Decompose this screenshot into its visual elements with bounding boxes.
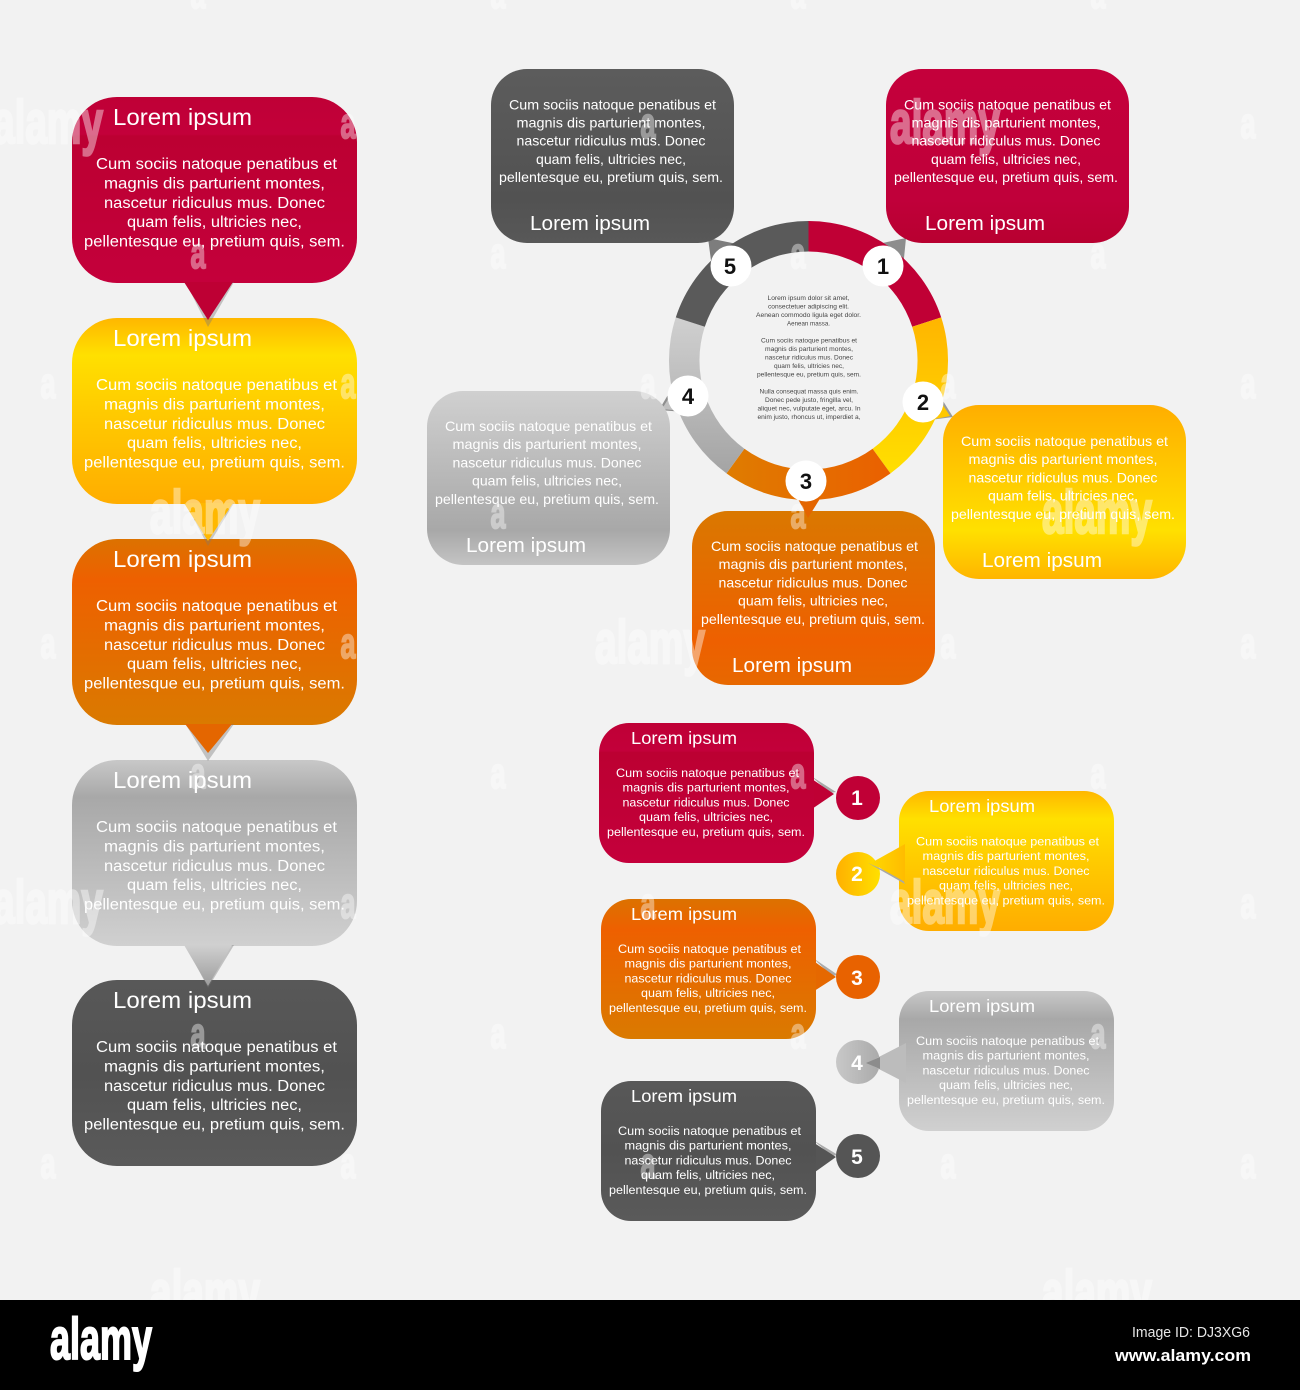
panel: ring callout dark — [491, 69, 737, 268]
text block: ring orange: Cum sociis natoque penatibus et — [711, 538, 918, 554]
panel: left column red box — [72, 97, 357, 283]
panel: ring callout gray — [427, 388, 684, 565]
text block: lower yellow: nascetur ridiculus mus. Donec — [922, 864, 1090, 878]
text block: ring orange: nascetur ridiculus mus. Donec — [718, 574, 908, 590]
watermark overlay: a — [1240, 99, 1256, 148]
text block: left red: pellentesque eu, pretium quis, sem. — [84, 234, 345, 251]
text block: ring red: Cum sociis natoque penatibus et — [904, 96, 1111, 112]
text block: left orange: pellentesque eu, pretium quis, sem. — [84, 676, 345, 693]
text block: left dark: magnis dis parturient montes, — [104, 1058, 325, 1075]
text block: ring yellow: quam felis, ultricies nec, — [988, 488, 1138, 504]
text block: ring dark: Cum sociis natoque penatibus et — [509, 96, 716, 112]
icon: ring number 2: 2 — [917, 390, 929, 415]
heading: lower gray: Lorem ipsum — [929, 996, 1035, 1016]
watermark overlay: a — [640, 99, 656, 148]
text block: ring centre: pellentesque eu, pretium quis, sem. — [757, 372, 861, 379]
text block: ring centre: Aenean commodo ligula eget dolor. — [756, 312, 861, 319]
watermark overlay: alamy — [150, 479, 260, 546]
icon: ring number 1: 1 — [877, 254, 889, 279]
watermark overlay: a — [940, 619, 956, 668]
watermark overlay: a — [340, 879, 356, 928]
text block: ring centre: Lorem ipsum dolor sit amet, — [768, 295, 850, 302]
text block: ring red: magnis dis parturient montes, — [912, 115, 1100, 131]
text block: ring centre: Cum sociis natoque penatibus et — [761, 338, 857, 345]
heading: ring gray: Lorem ipsum — [466, 534, 586, 557]
text block: lower orange — [609, 942, 807, 1015]
arrow: lower yellow — [868, 844, 905, 884]
icon: ring number 3 — [786, 460, 826, 502]
heading: lower red: Lorem ipsum — [631, 728, 737, 748]
watermark overlay: alamy — [1042, 1259, 1152, 1326]
panel: lower dark box — [601, 1081, 838, 1221]
watermark overlay: a — [1090, 229, 1106, 278]
heading: left yellow: Lorem ipsum — [113, 325, 252, 351]
icon: ring number 4: 4 — [682, 384, 695, 409]
text block: ring centre: nascetur ridiculus mus. Donec — [765, 355, 854, 362]
watermark overlay: a — [1240, 1139, 1256, 1188]
chart: segmented ring — [668, 221, 948, 518]
watermark overlay: a — [790, 1009, 806, 1058]
panel: lower orange box — [601, 899, 838, 1039]
watermark overlay: a — [190, 229, 206, 278]
text block: left red — [84, 156, 345, 251]
text block: ring centre: Aenean massa. — [787, 320, 830, 328]
text block: ring yellow: Cum sociis natoque penatibus et — [961, 433, 1168, 449]
text block: lower gray: magnis dis parturient montes, — [922, 1049, 1090, 1063]
text block: left orange: quam felis, ultricies nec, — [127, 656, 302, 673]
watermark overlay: a — [940, 359, 956, 408]
panel: ring callout orange — [692, 511, 935, 685]
icon: ring number 5 — [710, 246, 752, 286]
watermark overlay: a — [490, 749, 506, 798]
watermark overlay: a — [340, 619, 356, 668]
icon: lower number 3 — [836, 955, 880, 999]
panel: left column yellow box — [72, 318, 357, 504]
text block: lower yellow — [907, 834, 1105, 907]
arrow: lower gray — [866, 1043, 906, 1083]
heading: lower yellow: Lorem ipsum — [929, 796, 1035, 816]
text block: lower yellow: Cum sociis natoque penatibus et — [916, 834, 1100, 848]
text block: ring centre: consectetuer adipiscing elit. — [768, 304, 849, 310]
text block: lower red: quam felis, ultricies nec, — [639, 810, 773, 824]
text block: ring yellow — [951, 433, 1175, 522]
heading: left orange: Lorem ipsum — [113, 546, 252, 572]
text block: ring centre: aliquet nec, vulputate eget, arcu. In — [758, 406, 861, 412]
icon: ring number 5: 5 — [724, 254, 736, 279]
heading: left red: Lorem ipsum — [113, 104, 252, 130]
text block: left red: nascetur ridiculus mus. Donec — [104, 195, 325, 212]
text block: left yellow: nascetur ridiculus mus. Donec — [104, 416, 325, 433]
watermark overlay: a — [40, 619, 56, 668]
watermark overlay: a — [490, 1009, 506, 1058]
text block: left yellow: pellentesque eu, pretium quis, sem. — [84, 455, 345, 472]
watermark overlay: a — [640, 359, 656, 408]
text block: ring gray: Cum sociis natoque penatibus et — [445, 418, 652, 434]
text block: ring yellow: pellentesque eu, pretium quis, sem. — [951, 506, 1175, 522]
text block: lower gray: Cum sociis natoque penatibus et — [916, 1034, 1100, 1048]
text block: lower orange: magnis dis parturient montes, — [624, 957, 792, 971]
text block: left gray: nascetur ridiculus mus. Donec — [104, 858, 325, 875]
watermark overlay: a — [1240, 359, 1256, 408]
watermark overlay: a — [640, 1139, 656, 1188]
text block: ring centre: enim justo, rhoncus ut, imperdiet a, — [758, 414, 861, 421]
text block: ring orange — [701, 538, 925, 627]
footer url: www.alamy.com — [1114, 1347, 1251, 1365]
text block: lower dark: pellentesque eu, pretium quis, sem. — [609, 1183, 807, 1197]
text block: lower dark: nascetur ridiculus mus. Donec — [624, 1153, 792, 1167]
watermark overlay: a — [1240, 879, 1256, 928]
text block: ring centre — [756, 295, 861, 421]
watermark overlay: a — [40, 359, 56, 408]
icon: ring number 2 — [902, 382, 944, 422]
icon: lower number 2: 2 — [851, 863, 863, 886]
text block: lower dark: Cum sociis natoque penatibus et — [618, 1124, 802, 1138]
text block: lower dark: quam felis, ultricies nec, — [641, 1168, 775, 1182]
text block: ring orange: quam felis, ultricies nec, — [738, 593, 888, 609]
panel: left column dark box — [72, 980, 357, 1166]
text block: left dark: pellentesque eu, pretium quis, sem. — [84, 1117, 345, 1134]
arrow: lower dark — [808, 1139, 838, 1177]
text block: ring dark: magnis dis parturient montes, — [516, 115, 706, 131]
watermark overlay: a — [790, 229, 806, 278]
footer image id: Image ID: DJ3XG6 — [1132, 1325, 1250, 1341]
text block: left gray: quam felis, ultricies nec, — [127, 877, 302, 894]
text block: left dark — [84, 1039, 345, 1134]
heading: lower dark: Lorem ipsum — [631, 1086, 737, 1106]
icon: lower number 4 — [836, 1040, 880, 1084]
heading: ring orange: Lorem ipsum — [732, 654, 852, 677]
text block: ring centre: Donec pede justo, fringilla vel, — [765, 397, 853, 404]
text block: left orange — [84, 598, 345, 693]
heading: left gray: Lorem ipsum — [113, 767, 252, 793]
text block: left yellow: quam felis, ultricies nec, — [127, 435, 302, 452]
watermark overlay: a — [340, 1139, 356, 1188]
text block: ring gray: nascetur ridiculus mus. Donec — [452, 454, 642, 470]
panel: ring callout red — [878, 69, 1129, 268]
watermark overlay: alamy — [150, 1259, 260, 1326]
text block: ring red: quam felis, ultricies nec, — [931, 151, 1081, 167]
text block: lower orange: Cum sociis natoque penatibus et — [618, 942, 802, 956]
text block: lower gray: pellentesque eu, pretium quis, sem. — [907, 1093, 1105, 1107]
text block: ring centre: quam felis, ultricies nec, — [774, 363, 844, 370]
text block: lower orange: nascetur ridiculus mus. Donec — [624, 971, 792, 985]
footer logo: alamy — [50, 1307, 152, 1372]
text block: left red: magnis dis parturient montes, — [104, 175, 325, 192]
icon: lower number 5: 5 — [851, 1146, 863, 1169]
panel: lower yellow box — [899, 791, 1114, 931]
text block: lower yellow: pellentesque eu, pretium quis, sem. — [907, 893, 1105, 907]
text block: ring orange: magnis dis parturient montes, — [718, 556, 908, 572]
arrow: red to yellow — [184, 282, 234, 327]
text block: lower dark: magnis dis parturient montes, — [624, 1139, 792, 1153]
panel: left column orange box — [72, 539, 357, 725]
icon: lower number 5 — [836, 1134, 880, 1178]
text block: lower gray: nascetur ridiculus mus. Donec — [922, 1063, 1090, 1077]
text block: left red: quam felis, ultricies nec, — [127, 214, 302, 231]
text block: lower orange: quam felis, ultricies nec, — [641, 986, 775, 1000]
text block: ring dark: nascetur ridiculus mus. Donec — [516, 133, 706, 149]
text block: lower gray — [907, 1034, 1105, 1107]
icon: ring number 4 — [668, 376, 708, 416]
watermark overlay: a — [1090, 1009, 1106, 1058]
text block: ring gray — [435, 418, 659, 507]
text block: left yellow — [84, 377, 345, 472]
watermark overlay: alamy — [890, 89, 1000, 156]
watermark overlay: a — [1090, 749, 1106, 798]
text block: lower yellow: quam felis, ultricies nec, — [939, 879, 1073, 893]
text block: lower red: pellentesque eu, pretium quis, sem. — [607, 825, 805, 839]
panel: lower gray box — [899, 991, 1114, 1131]
text block: ring dark: pellentesque eu, pretium quis, sem. — [499, 169, 723, 185]
text block: lower dark — [609, 1124, 807, 1197]
text block: lower gray: quam felis, ultricies nec, — [939, 1078, 1073, 1092]
panel: left column gray box — [72, 760, 357, 946]
text block: left gray: Cum sociis natoque penatibus et — [96, 819, 338, 836]
text block: ring dark — [499, 96, 723, 185]
heading: left dark: Lorem ipsum — [113, 987, 252, 1013]
icon: lower number 1: 1 — [851, 787, 863, 810]
text block: ring orange: pellentesque eu, pretium quis, sem. — [701, 611, 925, 627]
watermark overlay: a — [940, 1139, 956, 1188]
text block: left red: Cum sociis natoque penatibus et — [96, 156, 338, 173]
heading: lower orange: Lorem ipsum — [631, 904, 737, 924]
text block: lower red: magnis dis parturient montes, — [622, 781, 790, 795]
watermark overlay: a — [340, 359, 356, 408]
text block: left gray: pellentesque eu, pretium quis, sem. — [84, 897, 345, 914]
text block: ring red: nascetur ridiculus mus. Donec — [912, 133, 1100, 149]
panel: lower red box — [599, 723, 836, 863]
footer band — [0, 1300, 1300, 1390]
text block: lower orange: pellentesque eu, pretium quis, sem. — [609, 1001, 807, 1015]
text block: ring gray: pellentesque eu, pretium quis, sem. — [435, 491, 659, 507]
text block: ring dark: quam felis, ultricies nec, — [536, 151, 686, 167]
watermark overlay: a — [340, 99, 356, 148]
icon: lower number 2 — [836, 852, 880, 896]
text block: left dark: Cum sociis natoque penatibus et — [96, 1039, 338, 1056]
heading: ring yellow: Lorem ipsum — [982, 549, 1102, 572]
text block: left orange: nascetur ridiculus mus. Donec — [104, 637, 325, 654]
watermark overlay: alamy — [890, 869, 1000, 936]
text block: ring centre: Nulla consequat massa quis enim. — [760, 388, 859, 396]
text block: left dark: nascetur ridiculus mus. Donec — [104, 1078, 325, 1095]
arrow: lower red — [806, 775, 836, 813]
icon: lower number 1 — [836, 776, 880, 820]
watermark overlay: a — [190, 1009, 206, 1058]
text block: left dark: quam felis, ultricies nec, — [127, 1097, 302, 1114]
arrow: gray to dark — [184, 945, 234, 988]
watermark overlay: a — [790, 749, 806, 798]
watermark overlay: alamy — [595, 609, 705, 676]
text block: left orange: magnis dis parturient montes, — [104, 617, 325, 634]
watermark overlay: a — [790, 489, 806, 538]
arrow: ring orange pointer — [797, 497, 821, 518]
text block: lower red — [607, 766, 805, 839]
text block: lower yellow: magnis dis parturient montes, — [922, 849, 1090, 863]
text block: left gray — [84, 819, 345, 914]
watermark overlay: a — [190, 749, 206, 798]
text block: left gray: magnis dis parturient montes, — [104, 838, 325, 855]
arrow: orange to gray — [185, 724, 234, 761]
text block: ring red: pellentesque eu, pretium quis, sem. — [894, 169, 1118, 185]
text block: ring yellow: nascetur ridiculus mus. Donec — [968, 469, 1158, 485]
watermark overlay: a — [640, 879, 656, 928]
watermark overlay: a — [490, 489, 506, 538]
text block: ring centre: magnis dis parturient montes, — [765, 346, 853, 353]
panel: ring callout yellow — [930, 396, 1186, 579]
text block: ring gray: quam felis, ultricies nec, — [472, 473, 622, 489]
text block: ring yellow: magnis dis parturient montes, — [968, 451, 1158, 467]
heading: ring dark: Lorem ipsum — [530, 212, 650, 235]
icon: ring number 1 — [862, 246, 904, 286]
watermark overlay: a — [1240, 619, 1256, 668]
text block: left yellow: Cum sociis natoque penatibus et — [96, 377, 338, 394]
heading: ring red: Lorem ipsum — [925, 212, 1045, 235]
icon: lower number 3: 3 — [851, 967, 863, 990]
watermark overlay: a — [490, 229, 506, 278]
text block: left orange: Cum sociis natoque penatibus et — [96, 598, 338, 615]
watermark overlay: alamy — [1042, 479, 1152, 546]
text block: left yellow: magnis dis parturient montes, — [104, 396, 325, 413]
text block: ring red — [894, 96, 1118, 185]
icon: ring number 3: 3 — [800, 469, 812, 494]
text block: ring gray: magnis dis parturient montes, — [452, 436, 642, 452]
arrow: lower orange — [808, 957, 838, 995]
text block: lower red: Cum sociis natoque penatibus et — [616, 766, 800, 780]
icon: lower number 4: 4 — [851, 1052, 863, 1075]
text block: lower red: nascetur ridiculus mus. Donec — [622, 795, 790, 809]
watermark overlay: a — [40, 1139, 56, 1188]
arrow: yellow to orange — [184, 503, 234, 546]
